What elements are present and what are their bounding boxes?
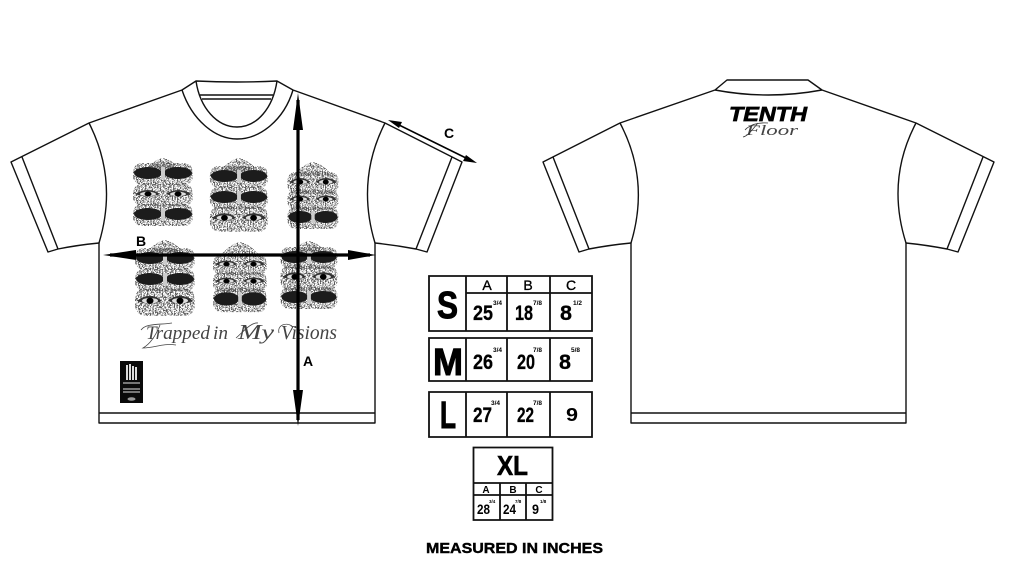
script caption: in	[213, 323, 228, 344]
script caption: My	[237, 320, 275, 344]
size table L: 7/8	[533, 400, 542, 407]
size table M: 20	[517, 351, 535, 374]
size table M	[429, 338, 592, 384]
size table M: 7/8	[533, 347, 542, 354]
size table L: 3/4	[491, 400, 500, 407]
size table L: 22	[517, 404, 534, 427]
size table XL: 1/8	[540, 499, 547, 504]
size table L: L	[440, 395, 456, 437]
footer note: MEASURED IN INCHES	[426, 541, 603, 557]
script caption: Trapped	[146, 323, 210, 344]
back logo: Floor	[744, 123, 798, 139]
back t-shirt outline	[543, 80, 994, 423]
label B: B	[136, 233, 146, 249]
size table S	[429, 276, 592, 331]
size table XL: A	[482, 485, 490, 496]
woven label	[120, 361, 143, 403]
size table XL: B	[509, 485, 517, 496]
size table S: C	[566, 277, 576, 293]
script caption: Visions	[281, 322, 337, 344]
eye artwork block 1	[133, 158, 193, 226]
size table M: 5/8	[571, 347, 580, 354]
size table S: 8	[560, 302, 572, 325]
size table XL: 28	[477, 501, 490, 517]
eye artwork block 4	[135, 240, 195, 316]
size table XL	[474, 448, 552, 520]
size table S: B	[523, 277, 533, 293]
back logo: TENTH	[729, 104, 808, 126]
size table S: 18	[515, 302, 533, 325]
measure arrow C	[388, 120, 477, 163]
size table S: S	[437, 285, 458, 327]
size table S: 7/8	[533, 300, 542, 307]
measure arrow B	[103, 250, 376, 260]
size table L	[429, 392, 592, 437]
label C: C	[444, 125, 454, 141]
front t-shirt outline	[11, 81, 462, 423]
size table L: 9	[566, 405, 578, 425]
size table M: 3/4	[493, 347, 502, 354]
size table M: M	[433, 342, 463, 384]
size table XL: C	[535, 485, 543, 496]
size table S: 25	[473, 302, 493, 325]
size table XL: XL	[497, 450, 528, 481]
back logo	[729, 104, 808, 139]
size table XL: 9	[532, 501, 539, 517]
size table L: 27	[473, 404, 492, 427]
eye artwork block 2	[210, 158, 268, 232]
size table M: 26	[473, 351, 493, 374]
eye artwork block 5	[213, 242, 267, 312]
measure arrow A	[293, 93, 303, 426]
size table S: 3/4	[493, 300, 502, 307]
eye artwork block 6	[280, 241, 338, 309]
eye artwork block 3	[288, 162, 338, 229]
label A: A	[303, 353, 313, 369]
size table XL: 24	[503, 501, 516, 517]
size table M: 8	[559, 351, 571, 374]
size table XL: 3/4	[489, 499, 496, 504]
size table XL: 7/8	[515, 499, 522, 504]
size table S: 1/2	[573, 300, 582, 307]
script caption	[141, 320, 337, 348]
size table S: A	[482, 277, 492, 293]
